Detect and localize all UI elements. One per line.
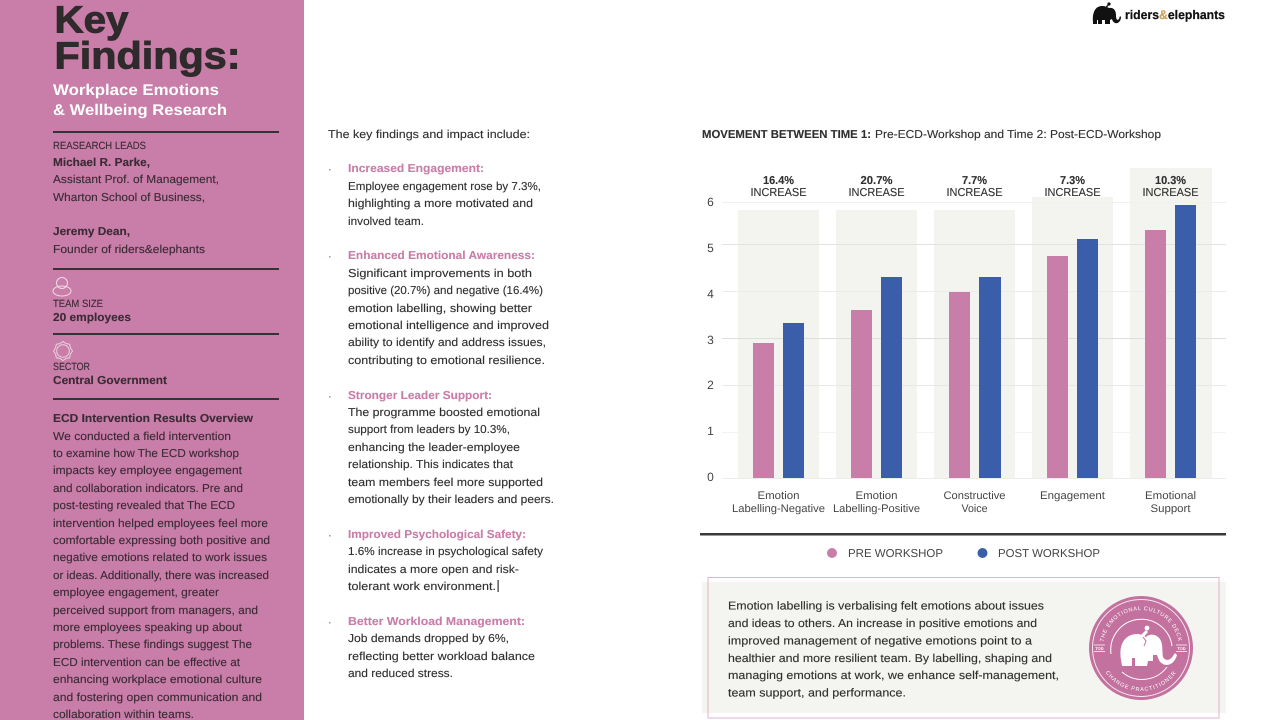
icon: sector gear xyxy=(54,342,72,360)
increase labels xyxy=(750,175,1199,199)
category labels: Emotion xyxy=(856,490,898,502)
finding: enhanced emotional awareness: emotion labelling, showing better xyxy=(348,303,532,315)
callout text: managing emotions at work, we enhance self-management, xyxy=(728,670,1059,682)
title: Key xyxy=(54,0,128,42)
increase labels: 10.3% xyxy=(1155,175,1186,187)
research leads: Michael R. Parke, xyxy=(53,157,150,169)
finding: better workload management: Better Workload Management: xyxy=(348,616,525,628)
legend: PRE WORKSHOP xyxy=(848,548,943,560)
title xyxy=(54,0,241,78)
finding: improved psychological safety: Improved Psychological Safety: xyxy=(348,529,526,541)
finding: enhanced emotional awareness xyxy=(329,250,549,367)
chart heading xyxy=(702,129,1161,141)
finding: improved psychological safety: tolerant work environment. xyxy=(348,581,496,593)
team size: TEAM SIZE xyxy=(53,298,103,310)
sector: Central Government xyxy=(53,375,167,387)
finding: enhanced emotional awareness: Enhanced Emotional Awareness: xyxy=(348,250,535,262)
sector xyxy=(53,361,167,387)
ECD intervention overview text: to examine how The ECD workshop xyxy=(53,448,239,460)
badge: emotional culture deck: TOD xyxy=(1177,646,1186,651)
finding: stronger leader support xyxy=(329,390,554,506)
callout text: healthier and more resilient team. By labelling, shaping and xyxy=(728,653,1052,665)
ECD intervention overview text: problems. These findings suggest The xyxy=(53,639,252,651)
callout text xyxy=(728,600,1059,700)
finding: better workload management: Job demands dropped by 6%, xyxy=(348,633,509,645)
research leads: Jeremy Dean, xyxy=(53,226,130,238)
finding: increased engagement xyxy=(329,163,541,228)
y axis labels: 4 xyxy=(707,287,714,301)
finding: better workload management xyxy=(329,616,535,680)
finding: enhanced emotional awareness: emotional intelligence and improved xyxy=(348,320,549,332)
finding: enhanced emotional awareness: contributing to emotional resilience. xyxy=(348,355,545,367)
ECD intervention overview text: or ideas. Additionally, there was increased xyxy=(53,570,269,582)
callout text: Emotion labelling is verbalising felt emotions about issues xyxy=(728,600,1044,612)
finding: improved psychological safety: 1.6% increase in psychological safety xyxy=(348,546,543,558)
pre workshop bars xyxy=(753,230,1166,478)
finding: increased engagement: involved team. xyxy=(348,216,424,228)
category labels: Labelling-Positive xyxy=(833,503,920,515)
category labels: Labelling-Negative xyxy=(732,503,825,515)
increase labels: INCREASE xyxy=(750,187,807,199)
badge: emotional culture deck: THE EMOTIONAL CULTURE DECK xyxy=(1100,606,1182,642)
category labels: Voice xyxy=(962,503,988,515)
callout panel xyxy=(702,577,1226,718)
ECD intervention overview text: enhancing workplace emotional culture xyxy=(53,674,262,686)
callout text: improved management of negative emotions point to a xyxy=(728,636,1033,648)
ECD intervention overview text: We conducted a field intervention xyxy=(53,431,231,443)
increase labels: 16.4% xyxy=(763,175,794,187)
badge: emotional culture deck: TOD xyxy=(1095,646,1104,651)
finding: increased engagement: highlighting a more motivated and xyxy=(348,198,533,210)
finding: stronger leader support: emotionally by their leaders and peers. xyxy=(348,494,554,506)
finding: stronger leader support: The programme boosted emotional xyxy=(348,407,540,419)
finding: better workload management: reflecting better workload balance xyxy=(348,651,535,663)
ECD intervention overview text: more employees speaking up about xyxy=(53,622,243,634)
category labels: Support xyxy=(1150,503,1190,515)
ECD intervention overview text: negative emotions related to work issues xyxy=(53,552,267,564)
finding: stronger leader support: support from leaders by 10.3%, xyxy=(348,424,510,436)
finding: enhanced emotional awareness: ability to identify and address issues, xyxy=(348,337,546,349)
finding: stronger leader support: Stronger Leader Support: xyxy=(348,390,492,402)
finding: stronger leader support: enhancing the leader-employee xyxy=(348,442,520,454)
icon: elephant with rider xyxy=(1120,626,1177,666)
y axis labels xyxy=(707,195,714,484)
ECD intervention overview text: intervention helped employees feel more xyxy=(53,518,268,530)
post workshop bars xyxy=(783,205,1196,478)
category labels xyxy=(732,490,1196,515)
finding: better workload management: and reduced stress. xyxy=(348,668,453,680)
y axis labels: 5 xyxy=(707,241,714,255)
ECD intervention overview text: employee engagement, greater xyxy=(53,587,219,599)
finding: stronger leader support: relationship. This indicates that xyxy=(348,459,514,471)
chart heading: Pre-ECD-Workshop and Time 2: Post-ECD-Workshop xyxy=(875,129,1161,141)
finding: increased engagement: Increased Engagement: xyxy=(348,163,484,175)
title: Findings: xyxy=(54,36,241,78)
icon: person xyxy=(53,278,71,296)
ECD intervention overview text xyxy=(53,413,270,720)
intro text: The key findings and impact include: xyxy=(328,129,530,141)
legend: POST WORKSHOP xyxy=(998,548,1100,560)
category labels: Emotion xyxy=(758,490,800,502)
increase labels: INCREASE xyxy=(946,187,1003,199)
ECD intervention overview text: ECD Intervention Results Overview xyxy=(53,413,253,425)
ECD intervention overview text: ECD intervention can be effective at xyxy=(53,657,241,669)
finding: improved psychological safety xyxy=(329,529,543,593)
research leads: Assistant Prof. of Management, xyxy=(53,174,219,186)
badge: emotional culture deck xyxy=(1089,596,1193,700)
panel: left sidebar xyxy=(0,0,304,720)
finding: enhanced emotional awareness: Significant improvements in both xyxy=(348,268,532,280)
ECD intervention overview text: comfortable expressing both positive and xyxy=(53,535,270,547)
finding: improved psychological safety: indicates a more open and risk- xyxy=(348,564,519,576)
bar chart xyxy=(707,168,1226,515)
logo: riders&elephants: riders&elephants xyxy=(1125,8,1225,22)
increase labels: INCREASE xyxy=(1044,187,1101,199)
y axis labels: 2 xyxy=(707,378,714,392)
subtitle xyxy=(53,82,227,119)
category labels: Emotional xyxy=(1145,490,1196,502)
finding: enhanced emotional awareness: positive (20.7%) and negative (16.4%) xyxy=(348,285,543,297)
increase labels: INCREASE xyxy=(848,187,905,199)
y axis labels: 6 xyxy=(707,195,714,209)
increase labels: 7.3% xyxy=(1060,175,1085,187)
callout text: team support, and performance. xyxy=(728,688,906,700)
research leads xyxy=(53,140,219,256)
y axis labels: 0 xyxy=(707,470,714,484)
y axis labels: 1 xyxy=(707,424,714,438)
research leads: Founder of riders&elephants xyxy=(53,244,205,256)
ECD intervention overview text: and fostering open communication and xyxy=(53,692,262,704)
increase labels: 7.7% xyxy=(962,175,987,187)
team size: 20 employees xyxy=(53,312,131,324)
ECD intervention overview text: post-testing revealed that The ECD xyxy=(53,500,235,512)
research leads: REASEARCH LEADS xyxy=(53,140,146,152)
category labels: Constructive xyxy=(944,490,1006,502)
chart heading: MOVEMENT BETWEEN TIME 1: xyxy=(702,129,871,141)
y axis labels: 3 xyxy=(707,333,714,347)
ECD intervention overview text: and collaboration indicators. Pre and xyxy=(53,483,243,495)
team size xyxy=(53,298,131,324)
increase labels: INCREASE xyxy=(1142,187,1199,199)
subtitle: & Wellbeing Research xyxy=(53,102,227,119)
finding: stronger leader support: team members feel more supported xyxy=(348,477,543,489)
research leads: Wharton School of Business, xyxy=(53,192,205,204)
badge: emotional culture deck: CHANGE PRACTITIONER xyxy=(1106,671,1176,691)
ECD intervention overview text: perceived support from managers, and xyxy=(53,605,258,617)
logo: riders&elephants xyxy=(1093,2,1225,24)
subtitle: Workplace Emotions xyxy=(53,82,219,99)
increase labels: 20.7% xyxy=(860,175,892,187)
callout text: and ideas to others. An increase in positive emotions and xyxy=(728,618,1037,630)
ECD intervention overview text: impacts key employee engagement xyxy=(53,465,243,477)
legend xyxy=(827,548,1100,560)
category labels: Engagement xyxy=(1040,490,1105,502)
finding: increased engagement: Employee engagement rose by 7.3%, xyxy=(348,181,541,193)
sector: SECTOR xyxy=(53,361,90,373)
